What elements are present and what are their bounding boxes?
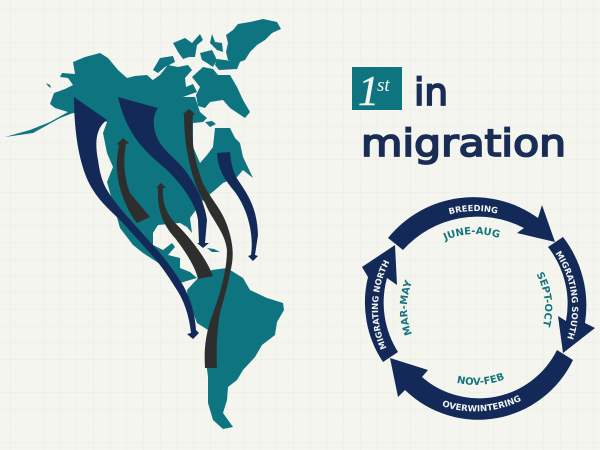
cycle diagram: [362, 197, 595, 420]
label: Nov-Feb: NOV-FEB: [457, 373, 504, 385]
arrow: navy eastern route: [217, 152, 258, 261]
cycle arrow: breeding: [388, 197, 555, 250]
title: migration: migration: [361, 122, 566, 165]
cycle arrow: breeding: BREEDING: [448, 204, 498, 214]
title badge: 1st: [352, 67, 402, 115]
arrow: dark long route from South America: [183, 109, 233, 368]
cycle arrow: overwintering: [390, 350, 573, 420]
label: June-Aug: JUNE-AUG: [443, 226, 500, 242]
Arctic islands: [173, 34, 203, 59]
cycle arrow: migrating south: [548, 237, 595, 353]
arrow: navy western route to South America: [74, 97, 199, 339]
cycle arrow: migrating south: MIGRATING SOUTH: [556, 250, 578, 340]
North America mainland: [5, 53, 253, 283]
arrow: dark central return: [156, 183, 213, 279]
cycle arrow: migrating north: [362, 245, 398, 362]
map: the Americas: [5, 19, 284, 429]
title badge: 1st: 1: [358, 69, 379, 115]
arrow: dark western return: [117, 138, 150, 223]
South America: [187, 268, 284, 429]
label: Mar-May: MAR-MAY: [400, 279, 412, 336]
label: Sept-Oct: SEPT-OCT: [537, 272, 552, 328]
cycle arrow: overwintering: OVERWINTERING: [442, 395, 521, 412]
title badge: 1st: st: [377, 75, 390, 96]
title: in: in: [414, 71, 448, 114]
arrow: navy central route: [118, 97, 209, 248]
Greenland-side island: [226, 19, 281, 63]
cycle arrow: migrating north: MIGRATING NORTH: [372, 260, 390, 350]
